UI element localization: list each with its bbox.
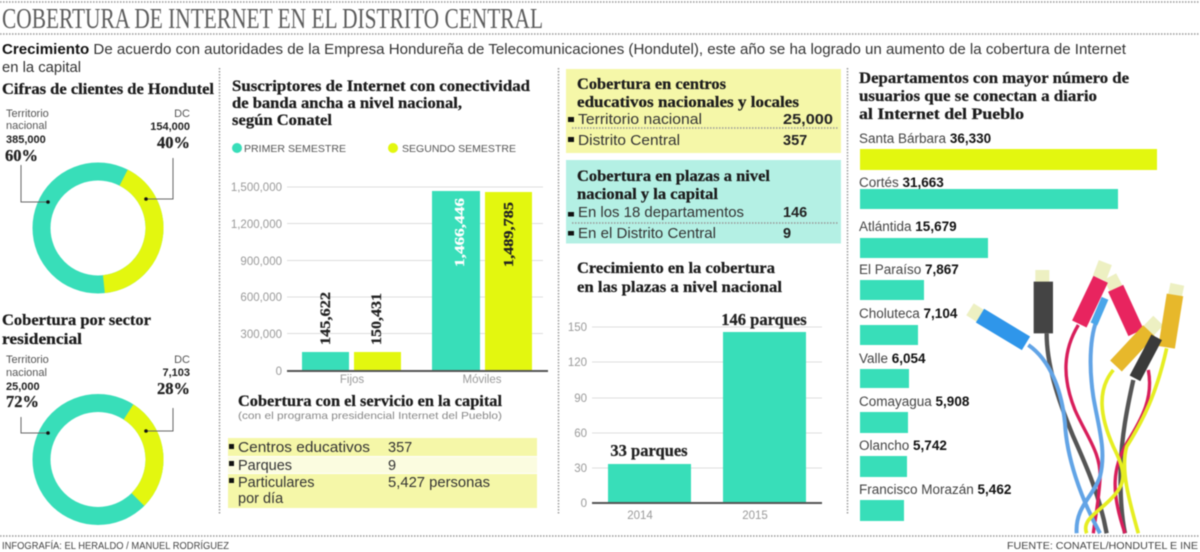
row: Central District: 357 <box>783 133 807 149</box>
heading: Departamentos con mayor número de <box>859 70 1129 87</box>
bar: Francisco Morazán <box>859 482 1011 521</box>
bar chart: plazas <box>568 310 822 522</box>
panel: educational centres coverage <box>566 69 841 153</box>
panel: departments ranking <box>859 70 1157 521</box>
panel: broadband subscribers <box>231 78 548 386</box>
row: Central District: Distrito Central <box>578 133 680 149</box>
legend: PRIMER SEMESTRE <box>244 143 346 155</box>
label: DC 40%: 40% <box>157 133 190 152</box>
plug: orange right <box>1167 295 1175 347</box>
bar chart: plazas: 120 <box>568 357 587 369</box>
bar: Comayagua <box>859 394 970 433</box>
row: Central District: En el Distrito Central <box>578 226 716 242</box>
row: national territory <box>568 112 833 128</box>
footer: source: FUENTE: CONATEL/HONDUTEL E INE <box>1007 540 1198 552</box>
row: individuals per day: Particulares <box>238 475 315 491</box>
bar chart: subscribers: 600,000 <box>240 292 282 304</box>
heading: broadband subscribers: según Conatel <box>232 112 333 129</box>
heading: Hondutel client figures: Cifras de clientes de Hondutel <box>2 81 215 98</box>
bar chart: subscribers: 900,000 <box>240 256 282 268</box>
row: 18 departments: En los 18 departamentos <box>578 205 744 221</box>
bar: Francisco Morazán: Francisco Morazán 5,462 <box>859 482 1011 497</box>
row: 18 departments: 146 <box>783 205 807 221</box>
footer: credit: INFOGRAFÍA: EL HERALDO / MANUEL RODRÍGUEZ <box>2 539 229 552</box>
bar: Valle: Valle 6,054 <box>859 351 926 366</box>
label: DC 28%: 28% <box>157 379 190 398</box>
table backgrounds <box>228 438 537 508</box>
label: national territory 60%: Territorio <box>6 108 49 120</box>
heading: Cobertura en plazas a nivel <box>577 168 771 185</box>
heading: broadband subscribers: Suscriptores de Internet con conectividad <box>232 78 530 95</box>
intro text: Crecimiento De acuerdo con autoridades de la Empresa Hondureña de Telecomunicaciones (Hondutel), este año se ha logrado un aumento de la cobertura de Internet <box>2 42 1126 58</box>
heading <box>577 260 783 296</box>
bar: El Paraíso <box>859 262 959 300</box>
bar: Olancho: Olancho 5,742 <box>859 438 947 453</box>
plug: blue <box>980 316 1026 343</box>
title: COBERTURA DE INTERNET EN EL DISTRITO CENTRAL <box>2 4 543 35</box>
bar: Comayagua: Comayagua 5,908 <box>859 394 970 409</box>
row: parks: Parques <box>238 458 292 474</box>
bar chart: subscribers: 1,500,000 <box>231 182 282 194</box>
label: national territory 72% <box>6 354 49 411</box>
plug: dark <box>1135 337 1157 378</box>
row: parks: 9 <box>388 458 396 474</box>
panel: coverage in the capital <box>228 393 537 508</box>
label: national territory 60%: nacional <box>6 120 47 132</box>
heading: broadband subscribers: de banda ancha a nivel nacional, <box>232 95 462 112</box>
label: DC 28% <box>157 354 190 398</box>
label: national territory 72%: nacional <box>6 367 47 379</box>
row: 18 departments <box>568 205 807 221</box>
legend <box>232 143 516 155</box>
bar: Choluteca <box>859 306 958 345</box>
bar chart: subscribers <box>231 182 548 386</box>
bar chart: subscribers: 0 <box>276 366 282 378</box>
bar: Santa Bárbara <box>859 131 1157 170</box>
label: DC 40% <box>150 108 190 152</box>
row: Central District <box>568 133 807 149</box>
bar chart: plazas: 0 <box>581 498 587 510</box>
bar chart: subscribers: Fijos <box>340 374 364 386</box>
bar: Cortés: Cortés 31,663 <box>859 175 944 190</box>
row: Central District: 9 <box>783 226 791 242</box>
subheading: (con el programa presidencial Internet del Pueblo) <box>238 410 502 422</box>
bar chart: plazas: 33 parques <box>610 441 688 460</box>
legend: SEGUNDO SEMESTRE <box>402 143 516 155</box>
bar chart: subscribers: 1,200,000 <box>231 219 282 231</box>
plug: orange left <box>1116 331 1149 366</box>
row: individuals per day: por día <box>238 491 284 507</box>
bar: Olancho <box>859 438 947 477</box>
bar: Choluteca: Choluteca 7,104 <box>859 306 958 321</box>
donut chart: residential <box>21 403 173 516</box>
bar: Atlántida <box>859 219 988 258</box>
row: Central District <box>568 226 791 242</box>
heading <box>577 76 799 111</box>
illustration: network cables <box>970 263 1177 533</box>
row: parks <box>229 458 396 474</box>
heading: nacional y la capital <box>577 186 719 203</box>
bar chart: plazas: 2014 <box>627 510 653 522</box>
bar chart: subscribers: 145,622 <box>318 292 334 345</box>
heading: Cobertura en centros <box>577 76 726 93</box>
bar chart: subscribers: 1,466,446 <box>453 198 468 267</box>
plug: black <box>1014 282 1072 333</box>
intro text <box>2 42 1126 76</box>
row: educational centres <box>229 440 412 456</box>
label: DC 40%: 154,000 <box>150 121 190 133</box>
row: educational centres: 357 <box>388 440 412 456</box>
intro text: en la capital <box>2 60 81 76</box>
heading: usuarios que se conectan a diario <box>859 88 1097 105</box>
row: national territory: Territorio nacional <box>578 112 702 128</box>
plug: pink left <box>1079 279 1101 324</box>
bar: Atlántida: Atlántida 15,679 <box>859 219 957 234</box>
bar chart: plazas: 146 parques <box>721 310 807 329</box>
bar chart: plazas: 150 <box>568 322 587 334</box>
heading: coverage in the capital: Cobertura con el servicio en la capital <box>238 393 503 410</box>
bar: Valle <box>859 351 926 388</box>
label: DC 40%: DC <box>174 108 190 120</box>
bar chart: subscribers: Móviles <box>463 374 502 386</box>
bar chart: plazas: 90 <box>574 393 587 405</box>
heading: en las plazas a nivel nacional <box>577 279 783 296</box>
plug: blue small <box>1094 298 1105 324</box>
label: DC 28%: DC <box>174 354 190 366</box>
heading: residential sector coverage: residencial <box>2 331 83 348</box>
bar: Santa Bárbara: Santa Bárbara 36,330 <box>859 131 991 146</box>
panel: Hondutel client figures <box>2 81 215 284</box>
plug: pink right <box>1116 288 1136 333</box>
row: educational centres: Centros educativos <box>238 440 370 456</box>
row: national territory: 25,000 <box>783 112 833 128</box>
heading: al Internet del Pueblo <box>859 106 1024 123</box>
heading: broadband subscribers <box>232 78 530 129</box>
heading: educativos nacionales y locales <box>577 94 799 111</box>
heading <box>577 168 771 203</box>
bar: El Paraíso: El Paraíso 7,867 <box>859 262 959 277</box>
bar chart: subscribers: 150,431 <box>369 293 385 345</box>
plug tips <box>970 263 1177 333</box>
label: DC 28%: 7,103 <box>162 367 190 379</box>
bar chart: plazas: 60 <box>574 428 587 440</box>
label: national territory 60%: 385,000 <box>6 134 46 146</box>
bar chart: subscribers: 300,000 <box>240 329 282 341</box>
heading <box>859 70 1129 123</box>
bar chart: plazas: 30 <box>574 463 587 475</box>
bar: Cortés <box>859 175 1118 209</box>
heading: residential sector coverage <box>2 312 151 348</box>
label: national territory 60% <box>5 108 49 165</box>
heading: residential sector coverage: Cobertura por sector <box>2 312 151 329</box>
bar chart: subscribers: 1,489,785 <box>502 202 517 267</box>
label: national territory 72%: 72% <box>6 392 39 411</box>
row: individuals per day <box>229 475 490 507</box>
heading: Crecimiento en la cobertura <box>577 260 775 277</box>
panel: residential sector coverage <box>2 312 190 516</box>
label: national territory 72%: 25,000 <box>6 381 40 393</box>
panel: plazas coverage <box>566 160 841 244</box>
bar chart: plazas: 2015 <box>742 510 768 522</box>
label: national territory 60%: 60% <box>5 146 38 165</box>
row: individuals per day: 5,427 personas <box>388 475 490 491</box>
label: national territory 72%: Territorio <box>6 354 49 366</box>
panel: growth in plazas <box>568 260 822 522</box>
donut chart: clients <box>21 158 173 284</box>
